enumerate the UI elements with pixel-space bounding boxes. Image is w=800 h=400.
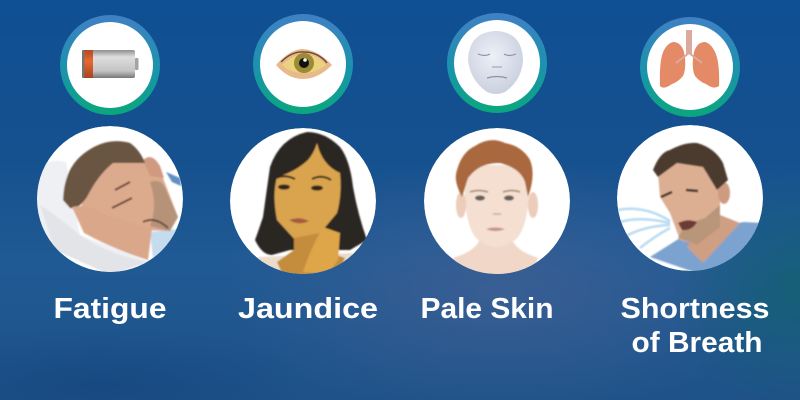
icon: yellowed eye [276,49,332,79]
icon: pale mask [468,31,523,94]
label: Shortness of Breath: Shortness [620,293,770,325]
label: Jaundice: Jaundice [238,293,378,325]
icon badge: battery [60,15,160,115]
icon: lungs [660,30,719,88]
icon badge: eye [253,14,353,114]
label: Shortness of Breath [620,293,770,359]
photo: jaundice, worried woman [230,128,376,280]
icon badge: lungs [640,17,740,117]
label: Pale Skin: Pale Skin [420,293,554,325]
label: Shortness of Breath: of Breath [632,327,762,359]
label: Fatigue: Fatigue [54,293,166,325]
photo: fatigue, man sleeping [37,126,183,275]
icon badge: pale face [447,13,547,113]
photo: shortness of breath, man exhaling [617,125,763,274]
photo: pale skin, young man [424,128,570,280]
icon: low battery [82,50,138,78]
